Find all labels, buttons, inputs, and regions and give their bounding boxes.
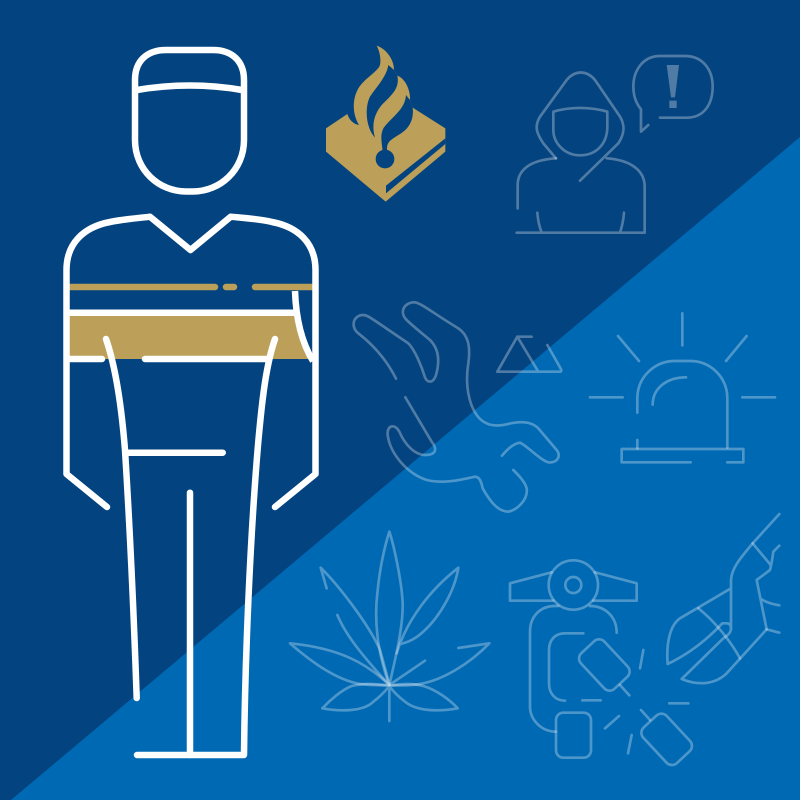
icon: broken scooter mirror [510, 560, 695, 768]
upper body outline [354, 302, 559, 462]
exclamation mark [667, 65, 679, 108]
icon: police officer figure [66, 50, 316, 755]
cutter blades and arm [667, 514, 779, 683]
bottom leaflets and stem [322, 684, 458, 721]
torso outline [66, 217, 316, 507]
gold chest band [68, 315, 311, 359]
lower body outline [388, 397, 527, 512]
shoulders and torso [517, 158, 645, 233]
icon: cannabis leaf [290, 532, 489, 721]
logo dark flame channels [367, 65, 445, 193]
broken mirror pieces [576, 636, 633, 694]
icon: hooded suspect with speech bubble [517, 56, 713, 233]
gold dashed stripe [68, 284, 313, 290]
hood [537, 72, 624, 181]
icon: police flame logo [326, 46, 445, 202]
siren rays [590, 313, 775, 397]
headlight [549, 560, 598, 610]
hand and details [698, 543, 779, 658]
face [553, 108, 607, 155]
logo gold base and flames [326, 46, 445, 202]
wheel [556, 713, 591, 758]
trousers [106, 339, 275, 755]
scooter body [530, 606, 617, 732]
breaking lines [605, 650, 688, 753]
icon: police siren light [590, 313, 775, 462]
evidence marker [497, 337, 561, 372]
head and cap [135, 50, 244, 192]
upper side leaflets [321, 568, 458, 685]
icon: bolt cutter in gloved hand [667, 514, 779, 683]
centre leaflet [376, 532, 403, 685]
siren base [622, 449, 743, 462]
lower side leaflets [290, 643, 489, 685]
speech bubble [633, 56, 713, 132]
handlebars [510, 572, 637, 601]
icon: chalk body outline with evidence marker [354, 302, 561, 512]
siren dome [637, 361, 727, 448]
